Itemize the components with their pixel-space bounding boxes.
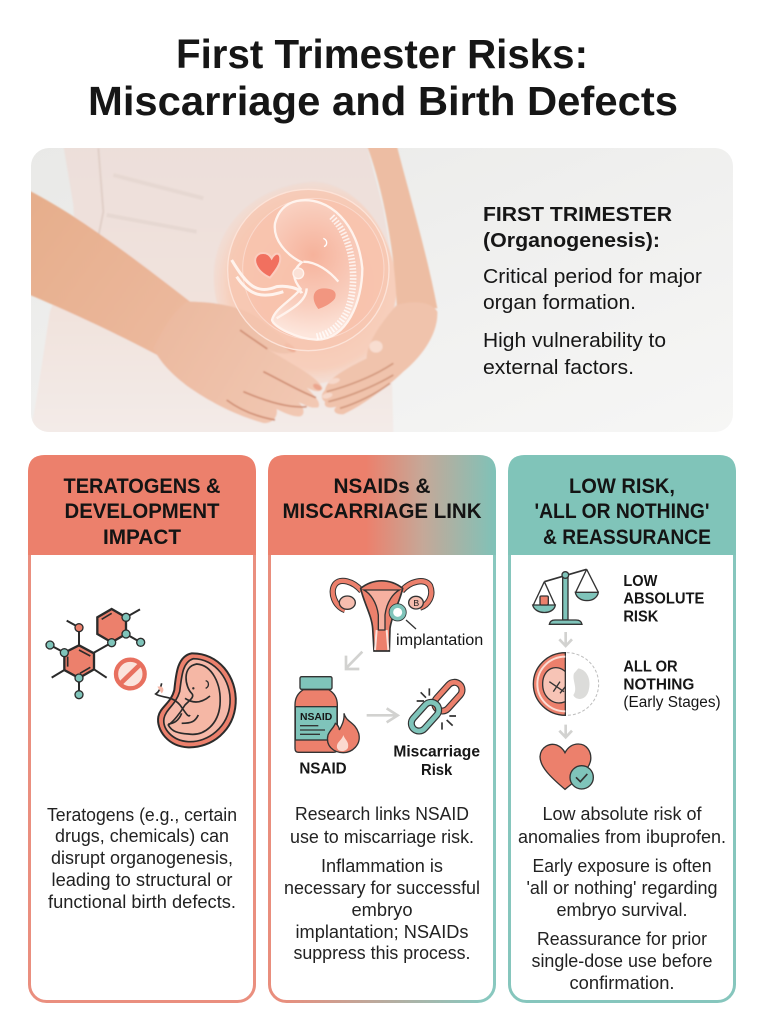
body text: Early exposure is often bbox=[532, 855, 712, 876]
icon: half embryo all or nothing bbox=[533, 653, 599, 715]
header text bbox=[64, 475, 220, 549]
label: low absolute risk: LOW bbox=[623, 573, 658, 590]
body text: confirmation. bbox=[570, 972, 674, 993]
icon: uterus: B bbox=[413, 598, 419, 608]
body text bbox=[47, 804, 237, 912]
label: all or nothing: (Early Stages) bbox=[623, 694, 721, 711]
header text: MISCARRIAGE LINK bbox=[282, 500, 482, 523]
icon: uterus bbox=[333, 581, 431, 651]
icon: NSAID bottle with flame bbox=[295, 677, 359, 753]
body text: single-dose use before bbox=[532, 950, 712, 971]
hero text: High vulnerability to bbox=[483, 329, 666, 352]
body text: use to miscarriage risk. bbox=[290, 826, 474, 847]
body text bbox=[284, 803, 480, 963]
hero text bbox=[483, 203, 702, 379]
header text: IMPACT bbox=[103, 526, 181, 549]
title: Miscarriage and Birth Defects bbox=[88, 78, 678, 124]
arrow: to NSAID bbox=[346, 652, 362, 669]
label: miscarriage risk: Risk bbox=[421, 762, 453, 779]
photo: pregnant belly with embryo illustration bbox=[30, 145, 734, 435]
body text: Teratogens (e.g., certain bbox=[47, 804, 237, 825]
panel header bbox=[28, 455, 256, 555]
icon: NSAID pathway diagram bbox=[295, 581, 483, 779]
panel: teratogens bbox=[28, 455, 256, 1002]
panel: low risk bbox=[508, 455, 736, 1002]
header text: DEVELOPMENT bbox=[64, 500, 220, 523]
body text: 'all or nothing' regarding bbox=[526, 877, 718, 898]
body text: Low absolute risk of bbox=[542, 803, 702, 824]
panel header bbox=[268, 455, 496, 555]
hero text: organ formation. bbox=[483, 291, 636, 314]
header text: NSAIDs & bbox=[334, 475, 430, 498]
label: all or nothing bbox=[623, 658, 721, 711]
body text: disrupt organogenesis, bbox=[51, 847, 233, 868]
label: NSAID: NSAID bbox=[299, 760, 347, 777]
icon: broken chain link bbox=[408, 679, 465, 734]
label: low absolute risk: RISK bbox=[623, 608, 658, 625]
body text: Reassurance for prior bbox=[537, 928, 707, 949]
header text: 'ALL OR NOTHING' bbox=[534, 500, 710, 523]
icon: molecule, prohibition sign and embryo bbox=[46, 609, 236, 747]
arrow: down bbox=[559, 632, 572, 646]
label: miscarriage risk: Miscarriage bbox=[393, 744, 480, 761]
header text: LOW RISK, bbox=[569, 475, 675, 498]
hero text: external factors. bbox=[483, 356, 634, 379]
hero text: FIRST TRIMESTER bbox=[483, 203, 672, 226]
panel: hero photo with text bbox=[30, 145, 734, 435]
body text: Research links NSAID bbox=[295, 803, 469, 824]
icon: NSAID pathway diagram: implantation bbox=[396, 632, 483, 649]
label: miscarriage risk bbox=[393, 744, 480, 779]
body text: embryo survival. bbox=[556, 899, 688, 920]
panel frame bbox=[30, 456, 254, 1002]
body text: Inflammation is bbox=[321, 855, 443, 876]
arrow: to broken link bbox=[367, 708, 398, 722]
body text: suppress this process. bbox=[294, 942, 470, 963]
body text: implantation; NSAIDs bbox=[296, 921, 468, 942]
label: low absolute risk: ABSOLUTE bbox=[623, 591, 704, 608]
body text: functional birth defects. bbox=[48, 891, 236, 912]
header text bbox=[282, 475, 482, 523]
icon: heart with check bbox=[540, 744, 593, 789]
icon: balance scale bbox=[533, 569, 598, 624]
body text bbox=[518, 803, 726, 993]
body text: leading to structural or bbox=[52, 869, 232, 890]
header text: & REASSURANCE bbox=[543, 526, 711, 549]
hero text: Critical period for major bbox=[483, 265, 702, 288]
arrow: down bbox=[559, 725, 572, 737]
panel: NSAIDs bbox=[268, 455, 496, 1002]
icon: NSAID bottle with flame: NSAID bbox=[300, 712, 332, 723]
panel header bbox=[508, 455, 736, 555]
title bbox=[88, 31, 678, 124]
panel frame bbox=[510, 456, 734, 1002]
label: all or nothing: ALL OR bbox=[623, 658, 678, 675]
body text: drugs, chemicals) can bbox=[55, 825, 229, 846]
header text bbox=[534, 475, 711, 549]
body text: anomalies from ibuprofen. bbox=[518, 826, 726, 847]
body text: embryo bbox=[352, 899, 412, 920]
hero text: (Organogenesis): bbox=[483, 229, 660, 252]
icon: risk flow bbox=[533, 569, 721, 789]
label: low absolute risk bbox=[623, 573, 704, 625]
panel frame bbox=[270, 456, 494, 1002]
label: all or nothing: NOTHING bbox=[623, 676, 694, 693]
title: First Trimester Risks: bbox=[176, 31, 588, 77]
header text: TERATOGENS & bbox=[64, 475, 220, 498]
body text: necessary for successful bbox=[284, 877, 480, 898]
